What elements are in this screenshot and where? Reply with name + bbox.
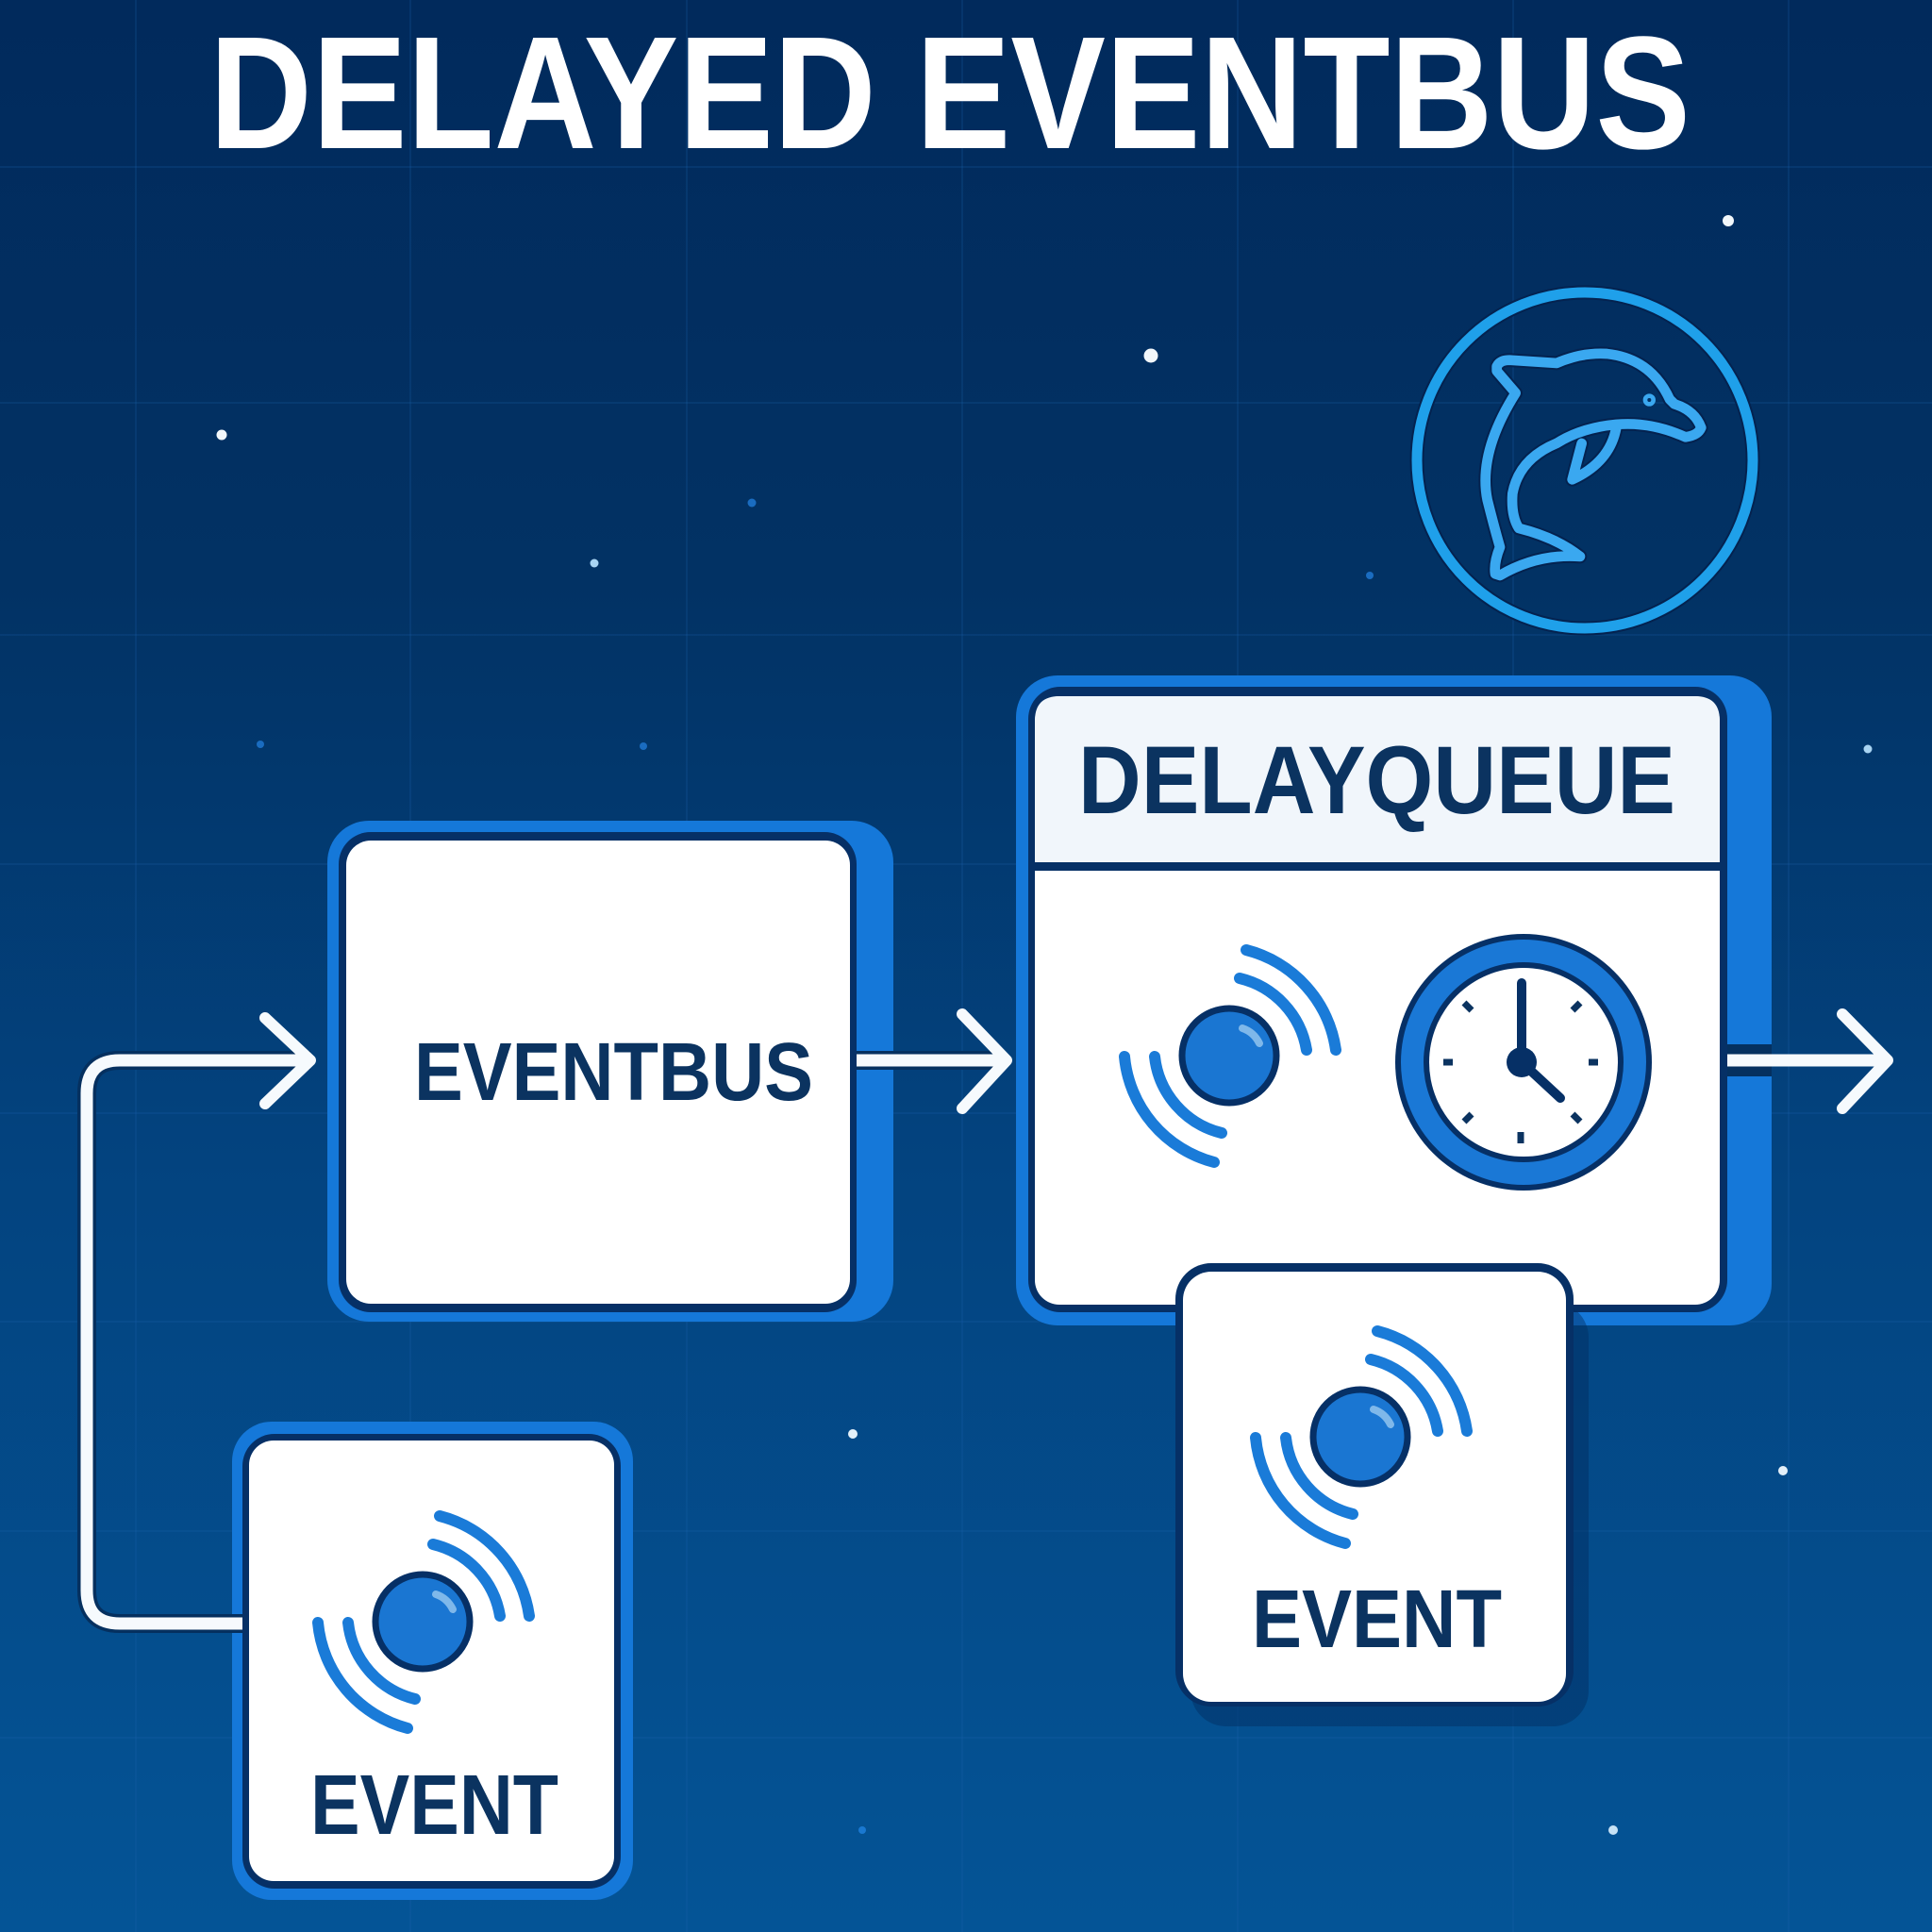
icon: event signal bbox=[1256, 1331, 1467, 1543]
event label: EVENT bbox=[310, 1758, 558, 1853]
icon: event signal bbox=[318, 1516, 529, 1728]
icon: event signal bbox=[1124, 950, 1336, 1162]
arrow: delayqueue output bbox=[1727, 1014, 1888, 1108]
delayqueue header bbox=[1035, 696, 1720, 861]
panel: source event card bbox=[232, 1422, 633, 1900]
stars bbox=[217, 215, 1872, 1835]
title: DELAYED EVENTBUS bbox=[209, 4, 1690, 183]
delayqueue label: DELAYQUEUE bbox=[1078, 726, 1675, 834]
event label: EVENT bbox=[1252, 1574, 1502, 1665]
panel: delayqueue bbox=[1016, 675, 1772, 1325]
icon: dolphin in circle bbox=[1417, 292, 1753, 628]
panel: eventbus bbox=[327, 821, 893, 1322]
icon: clock bbox=[1395, 934, 1652, 1191]
eventbus label: EVENTBUS bbox=[414, 1026, 813, 1118]
panel: delayed event card bbox=[1175, 1263, 1589, 1726]
arrow: eventbus to delayqueue bbox=[857, 1014, 1007, 1108]
arrow: event to eventbus bbox=[87, 1018, 310, 1624]
connector: source event exit bbox=[226, 1614, 242, 1633]
